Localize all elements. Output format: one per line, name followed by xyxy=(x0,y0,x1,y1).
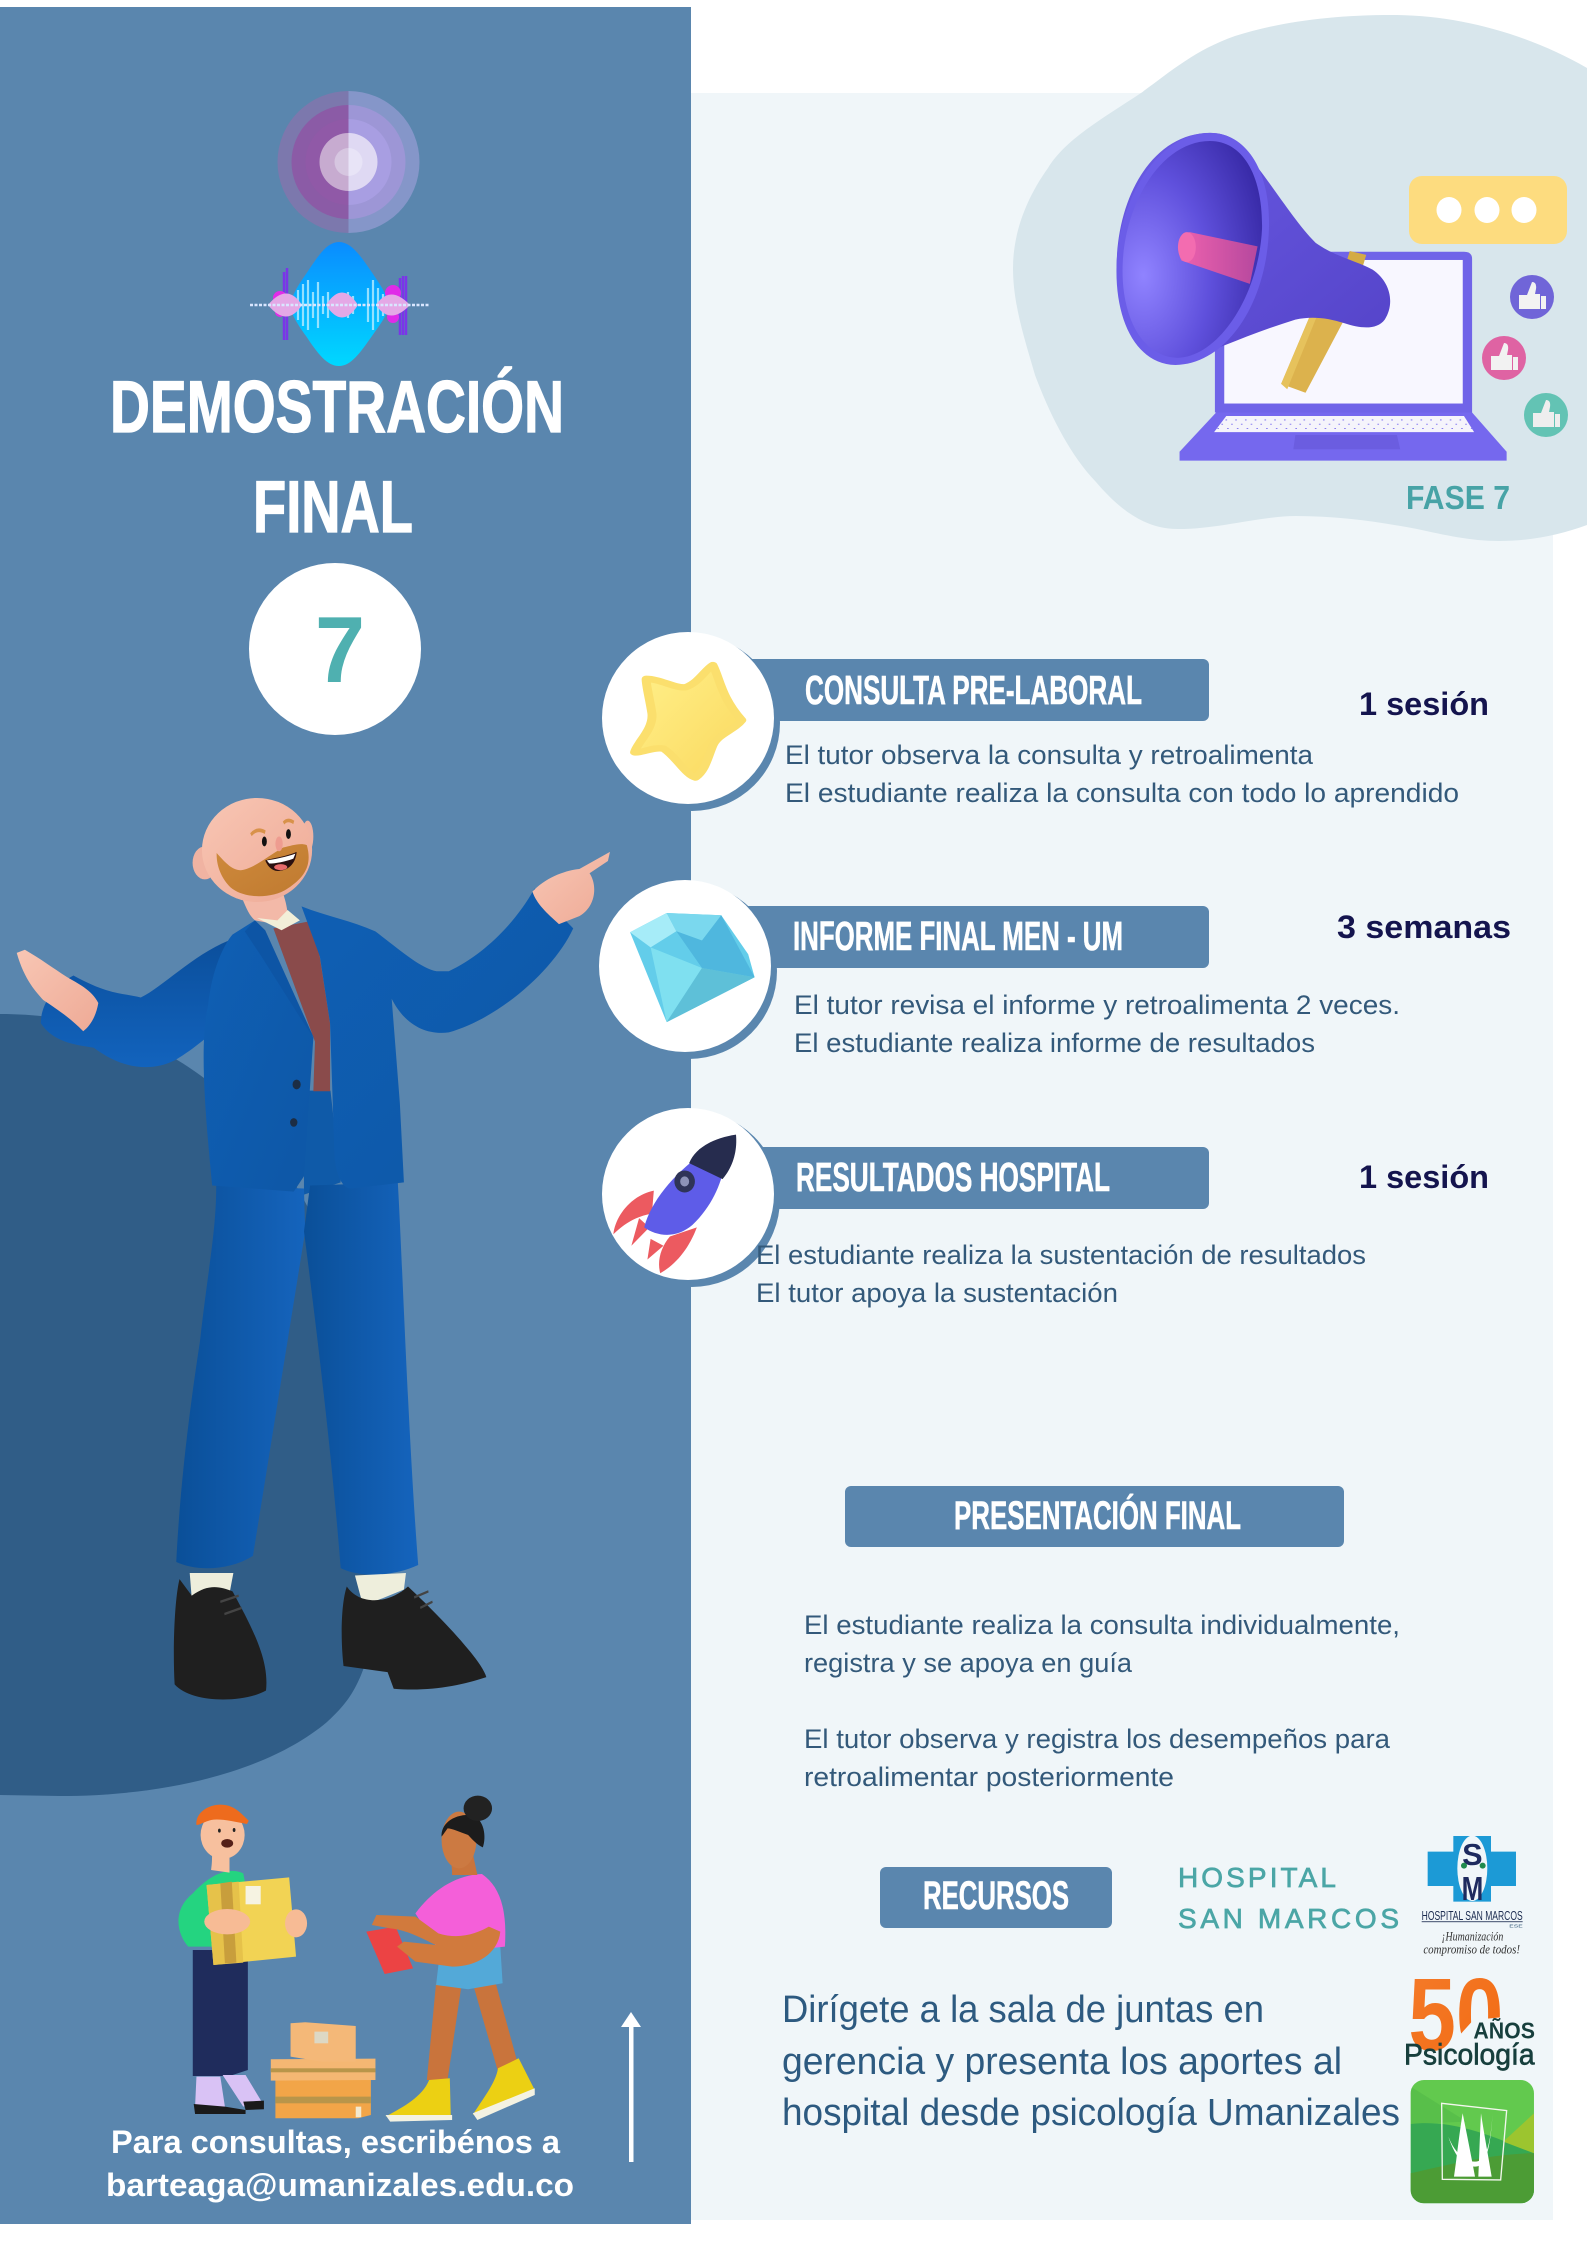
step 1: consulta pre-laboral xyxy=(602,632,1489,811)
contact text xyxy=(106,2124,574,2203)
logo: hospital san marcos: S xyxy=(1462,1838,1483,1872)
illustration: parcel stack xyxy=(271,2022,375,2118)
illustration: delivery man with box xyxy=(178,1805,307,2114)
icon: sound wave xyxy=(250,242,429,366)
logo: 50 años psicología: Psicología xyxy=(1404,2038,1535,2071)
hospital name xyxy=(1178,1862,1399,1934)
text block: instructions xyxy=(782,1989,1400,2134)
hospital name: HOSPITAL xyxy=(1178,1862,1336,1893)
step 2 banner xyxy=(740,906,1209,968)
logo: hospital san marcos: ESE xyxy=(1509,1923,1524,1929)
text block: instructions: Dirígete a la sala de juntas en xyxy=(782,1989,1264,2031)
speech bubble with dots xyxy=(1409,176,1567,244)
title: FINAL xyxy=(253,467,413,548)
banner: presentación final: PRESENTACIÓN FINAL xyxy=(954,1492,1241,1538)
step 3 duration: 1 sesión xyxy=(1359,1159,1489,1195)
text block: instructions: hospital desde psicología Umanizales xyxy=(782,2092,1400,2134)
panel: right light column xyxy=(691,93,1553,2220)
logo: hospital san marcos xyxy=(1422,1836,1524,1956)
contact text: barteaga@umanizales.edu.co xyxy=(106,2167,574,2203)
step 3: resultados hospital xyxy=(602,1108,1489,1308)
title xyxy=(110,367,564,548)
illustration: woman with clipboard xyxy=(366,1796,535,2122)
step 2: informe final xyxy=(599,880,1511,1059)
step 2 heading: INFORME FINAL MEN - UM xyxy=(793,913,1123,959)
contact text: Para consultas, escribénos a xyxy=(111,2124,560,2160)
dark circle behind character xyxy=(0,1014,382,1796)
decorative blob behind megaphone xyxy=(1013,15,1587,541)
phase number badge: 7 xyxy=(315,597,365,702)
step 2 description xyxy=(794,990,1400,1058)
step 1 description xyxy=(785,740,1459,808)
logo: hospital san marcos: ¡Humanización xyxy=(1442,1930,1503,1944)
step 3 badge xyxy=(602,1108,780,1287)
icon: concentric purple circle xyxy=(278,91,420,233)
logo: 50 años psicología: 50 xyxy=(1408,1956,1503,2072)
step 1 heading: CONSULTA PRE-LABORAL xyxy=(805,667,1142,713)
step 3 description: El tutor apoya la sustentación xyxy=(756,1278,1118,1308)
step 1 badge xyxy=(602,632,780,811)
hospital name: SAN MARCOS xyxy=(1178,1903,1399,1934)
logo: hospital san marcos: compromiso de todos! xyxy=(1423,1942,1520,1956)
icon: star xyxy=(635,665,742,778)
phase label: FASE 7 xyxy=(1406,479,1510,516)
icon: rocket xyxy=(613,1135,736,1273)
illustration: megaphone and laptop xyxy=(1116,133,1507,461)
text block: presentación final xyxy=(804,1610,1400,1792)
icon: purple thumbs up xyxy=(1510,275,1554,319)
step 3 description: El estudiante realiza la sustentación de resultados xyxy=(756,1240,1366,1270)
text block: presentación final: El estudiante realiza la consulta individualmente, xyxy=(804,1610,1400,1640)
step 2 badge xyxy=(599,880,777,1059)
step 3 heading: RESULTADOS HOSPITAL xyxy=(796,1154,1110,1200)
step 3 description xyxy=(756,1240,1366,1308)
text block: presentación final: registra y se apoya en guía xyxy=(804,1648,1133,1678)
step 2 description: El tutor revisa el informe y retroalimenta 2 veces. xyxy=(794,990,1400,1020)
text block: presentación final: retroalimentar posteriormente xyxy=(804,1762,1174,1792)
logo: hospital san marcos: HOSPITAL SAN MARCOS xyxy=(1422,1909,1523,1923)
arrow pointing up xyxy=(621,2012,641,2162)
step 1 description: El tutor observa la consulta y retroalimenta xyxy=(785,740,1314,770)
text block: presentación final: El tutor observa y registra los desempeños para xyxy=(804,1724,1391,1754)
banner: recursos: RECURSOS xyxy=(923,1874,1069,1918)
text block: instructions: gerencia y presenta los aportes al xyxy=(782,2041,1342,2083)
step 2 description: El estudiante realiza informe de resultados xyxy=(794,1028,1315,1058)
logo: hospital san marcos: M xyxy=(1462,1871,1483,1908)
illustration: man in blue suit xyxy=(17,798,610,1699)
step 1 description: El estudiante realiza la consulta con todo lo aprendido xyxy=(785,778,1459,808)
icon: diamond xyxy=(630,913,755,1022)
banner: presentación final xyxy=(845,1486,1344,1547)
step 1 banner xyxy=(740,659,1209,721)
icon: pink thumbs up xyxy=(1482,336,1526,380)
step 1 duration: 1 sesión xyxy=(1359,686,1489,722)
icon: teal thumbs up xyxy=(1524,393,1568,437)
step 2 duration: 3 semanas xyxy=(1337,909,1511,945)
step 3 banner xyxy=(740,1147,1209,1209)
logo: universidad de manizales xyxy=(1411,2080,1534,2203)
banner: recursos xyxy=(880,1867,1112,1928)
title: DEMOSTRACIÓN xyxy=(110,367,564,448)
logo: 50 años psicología: AÑOS xyxy=(1473,2017,1535,2043)
phase number badge xyxy=(249,563,421,735)
panel: left blue column xyxy=(0,7,691,2224)
